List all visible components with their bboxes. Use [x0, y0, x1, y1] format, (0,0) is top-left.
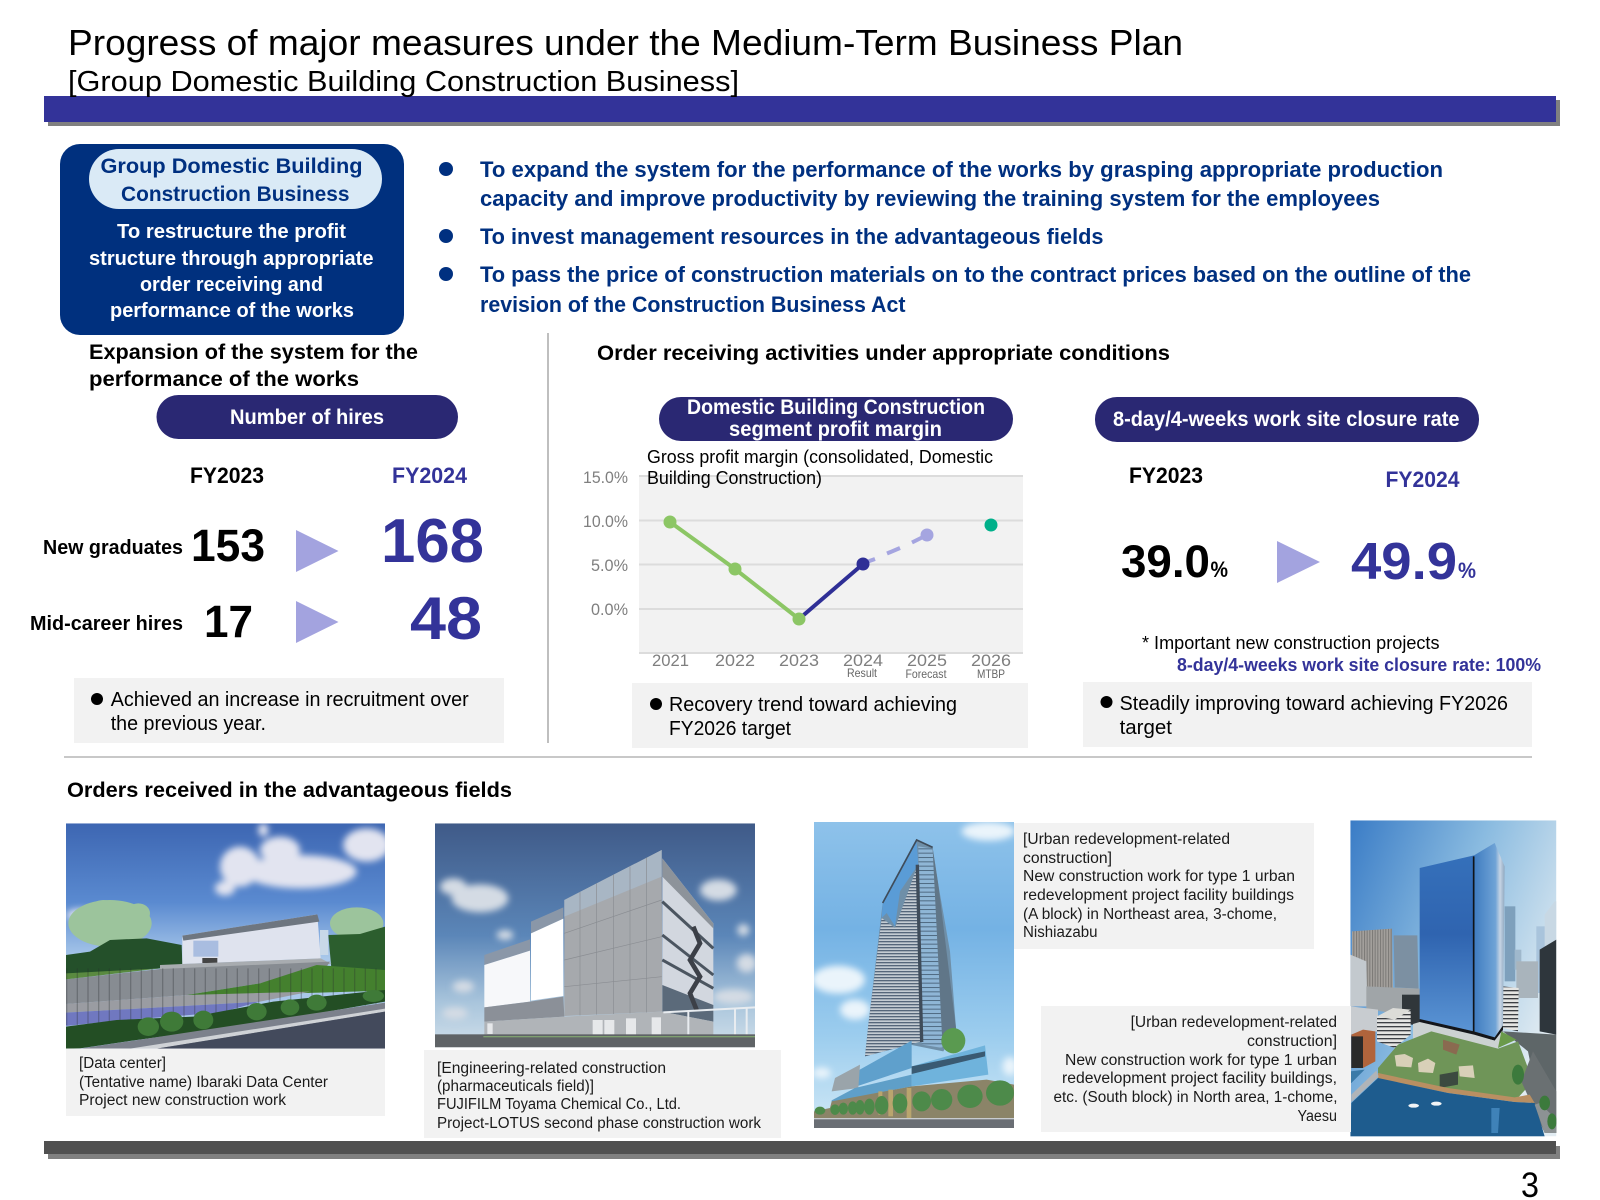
- value: FY2023 rate: %: [1210, 557, 1228, 582]
- caption: Nishiazabu project: (A block) in Northeast area, 3-chome,: [1023, 906, 1277, 923]
- callout: recruitment: Achieved an increase in recruitment over: [111, 689, 469, 711]
- y axis labels: 0.0%: [591, 601, 628, 619]
- bullet list: key measures: capacity and improve productivity by reviewing the training system for the employees: [480, 186, 1380, 211]
- y axis labels: 5.0%: [591, 557, 628, 575]
- bullet list: key measures: [439, 157, 1471, 317]
- column labels: [1129, 463, 1460, 492]
- caption: data center: Project new construction work: [79, 1092, 286, 1109]
- pill: profit margin: Domestic Building Construction: [687, 396, 985, 419]
- sub heading: [Group Domestic Building Construction Business]: [68, 66, 739, 98]
- callout: steadily improving: [1083, 682, 1532, 747]
- caption: Yaesu project: redevelopment project facility buildings,: [1062, 1070, 1337, 1087]
- panel: number of hires: [30, 340, 504, 743]
- photo: Yaesu tower: [1350, 820, 1557, 1136]
- x axis labels: 2021: [652, 652, 689, 670]
- x axis labels: 2024: [843, 652, 883, 670]
- bullet list: key measures: To invest management resources in the advantageous fields: [480, 224, 1104, 249]
- row: new graduates: [43, 507, 484, 576]
- x axis labels: 2026: [971, 652, 1011, 670]
- caption: Yaesu project: [Urban redevelopment-related: [1131, 1014, 1337, 1031]
- photo: pharmaceutical plant: [435, 823, 757, 1047]
- chart caption: Gross profit margin (consolidated, Domestic: [647, 446, 993, 467]
- objective text: performance of the works: [110, 300, 354, 322]
- caption: Nishiazabu project: Nishiazabu: [1023, 924, 1098, 941]
- caption: pharmaceutical plant: FUJIFILM Toyama Chemical Co., Ltd.: [437, 1096, 681, 1113]
- caption: Nishiazabu project: [1014, 823, 1314, 949]
- heading: expansion of the system: Expansion of the system for the: [89, 340, 418, 364]
- column labels: [190, 463, 468, 488]
- pill: segment name: Construction Business: [121, 182, 350, 206]
- title: [44, 22, 1560, 126]
- pill: segment name: [89, 149, 382, 209]
- pill: number of hires: Number of hires: [230, 406, 384, 429]
- main heading: Progress of major measures under the Medium-Term Business Plan: [68, 22, 1183, 63]
- column labels: FY2023: [1129, 463, 1203, 488]
- callout: recovery trend: [632, 683, 1028, 748]
- value: FY2023 rate: 39.0: [1121, 536, 1210, 587]
- pill: closure rate: [1095, 397, 1479, 442]
- row: mid-career hires: 48: [410, 585, 482, 652]
- caption: Nishiazabu project: redevelopment project facility buildings: [1023, 887, 1294, 904]
- heading: orders received: Orders received in the advantageous fields: [67, 778, 512, 802]
- x axis labels: [652, 652, 1011, 681]
- value: FY2024 rate: %: [1458, 558, 1476, 583]
- caption: Yaesu project: New construction work for type 1 urban: [1065, 1052, 1337, 1069]
- objective text: structure through appropriate: [89, 248, 374, 270]
- chart caption: [647, 446, 993, 488]
- x axis labels: Forecast: [906, 667, 947, 681]
- bullet list: key measures: revision of the Construction Business Act: [480, 292, 906, 317]
- heading: expansion of the system: performance of the works: [89, 367, 359, 391]
- caption: Nishiazabu project: [Urban redevelopment-related: [1023, 831, 1230, 848]
- note: important projects: * Important new construction projects: [1142, 633, 1440, 653]
- column labels: FY2024: [392, 463, 468, 488]
- line chart: [583, 446, 1023, 681]
- caption: data center: [66, 1049, 385, 1116]
- x axis labels: 2023: [779, 652, 819, 670]
- callout: recovery trend: Recovery trend toward achieving: [669, 694, 957, 716]
- heading: order receiving activities: Order receiving activities under appropriate conditions: [597, 341, 1170, 365]
- row: new graduates: 168: [381, 507, 484, 576]
- panel: work site closure rate: [1083, 397, 1541, 747]
- caption: Yaesu project: etc. (South block) in North area, 1-chome,: [1054, 1089, 1338, 1106]
- callout: recruitment: [74, 678, 504, 743]
- pill: number of hires: [156, 395, 458, 439]
- caption: pharmaceutical plant: (pharmaceuticals field)]: [437, 1078, 594, 1095]
- dashed forecast line: [868, 535, 927, 562]
- row: new graduates: 153: [191, 520, 265, 571]
- callout: steadily improving: Steadily improving toward achieving FY2026: [1120, 693, 1508, 715]
- column labels: FY2023: [190, 463, 264, 488]
- pill: profit margin: segment profit margin: [729, 418, 942, 441]
- callout: recovery trend: FY2026 target: [669, 718, 791, 740]
- x axis labels: MTBP: [977, 667, 1005, 681]
- caption: Nishiazabu project: New construction work for type 1 urban: [1023, 868, 1295, 885]
- header bar: [44, 96, 1560, 126]
- pill: closure rate: 8-day/4-weeks work site closure rate: [1113, 408, 1460, 431]
- photo: data center: [66, 823, 390, 1049]
- caption: Yaesu project: [1041, 1006, 1351, 1132]
- photo: Nishiazabu tower: [812, 822, 1017, 1128]
- caption: pharmaceutical plant: [424, 1050, 781, 1138]
- y axis labels: [583, 469, 628, 619]
- callout: recruitment: the previous year.: [111, 713, 266, 735]
- callout: steadily improving: target: [1120, 717, 1172, 739]
- note: important projects: 8-day/4-weeks work site closure rate: 100%: [1177, 655, 1541, 675]
- caption: Yaesu project: Yaesu: [1298, 1108, 1337, 1125]
- caption: pharmaceutical plant: [Engineering-related construction: [437, 1060, 666, 1077]
- row: mid-career hires: [30, 585, 482, 652]
- objective text: To restructure the profit: [117, 221, 346, 243]
- footer bar: [44, 1141, 1560, 1159]
- y axis labels: 15.0%: [583, 469, 628, 487]
- objective text: order receiving and: [140, 274, 323, 296]
- pill: profit margin: [659, 396, 1013, 441]
- caption: data center: [Data center]: [79, 1055, 166, 1072]
- caption: Yaesu project: construction]: [1247, 1033, 1337, 1050]
- panel: business objective: [60, 144, 404, 335]
- caption: Nishiazabu project: construction]: [1023, 850, 1112, 867]
- value: FY2024 rate: 49.9: [1351, 533, 1457, 591]
- y axis labels: 10.0%: [583, 513, 628, 531]
- caption: data center: (Tentative name) Ibaraki Data Center: [79, 1074, 328, 1091]
- chart caption: Building Construction): [647, 467, 822, 488]
- panel: segment profit margin: [583, 396, 1028, 748]
- row: mid-career hires: 17: [204, 596, 253, 647]
- row: mid-career hires: Mid-career hires: [30, 613, 183, 635]
- x axis labels: Result: [847, 666, 878, 680]
- bullet list: key measures: To pass the price of construction materials on to the contract prices based on the outline of the: [480, 262, 1471, 287]
- x axis labels: 2022: [715, 652, 755, 670]
- caption: pharmaceutical plant: Project-LOTUS second phase construction work: [437, 1115, 761, 1132]
- bullet list: key measures: To expand the system for the performance of the works by grasping appropriate production: [480, 157, 1443, 182]
- row: new graduates: New graduates: [43, 537, 183, 559]
- objective text: [89, 221, 374, 322]
- x axis labels: 2025: [907, 652, 947, 670]
- arrow: [1277, 541, 1320, 583]
- heading: expansion of the system: [89, 340, 418, 391]
- note: important projects: [1142, 633, 1541, 675]
- pill: segment name: Group Domestic Building: [100, 154, 362, 178]
- column labels: FY2024: [1386, 467, 1460, 492]
